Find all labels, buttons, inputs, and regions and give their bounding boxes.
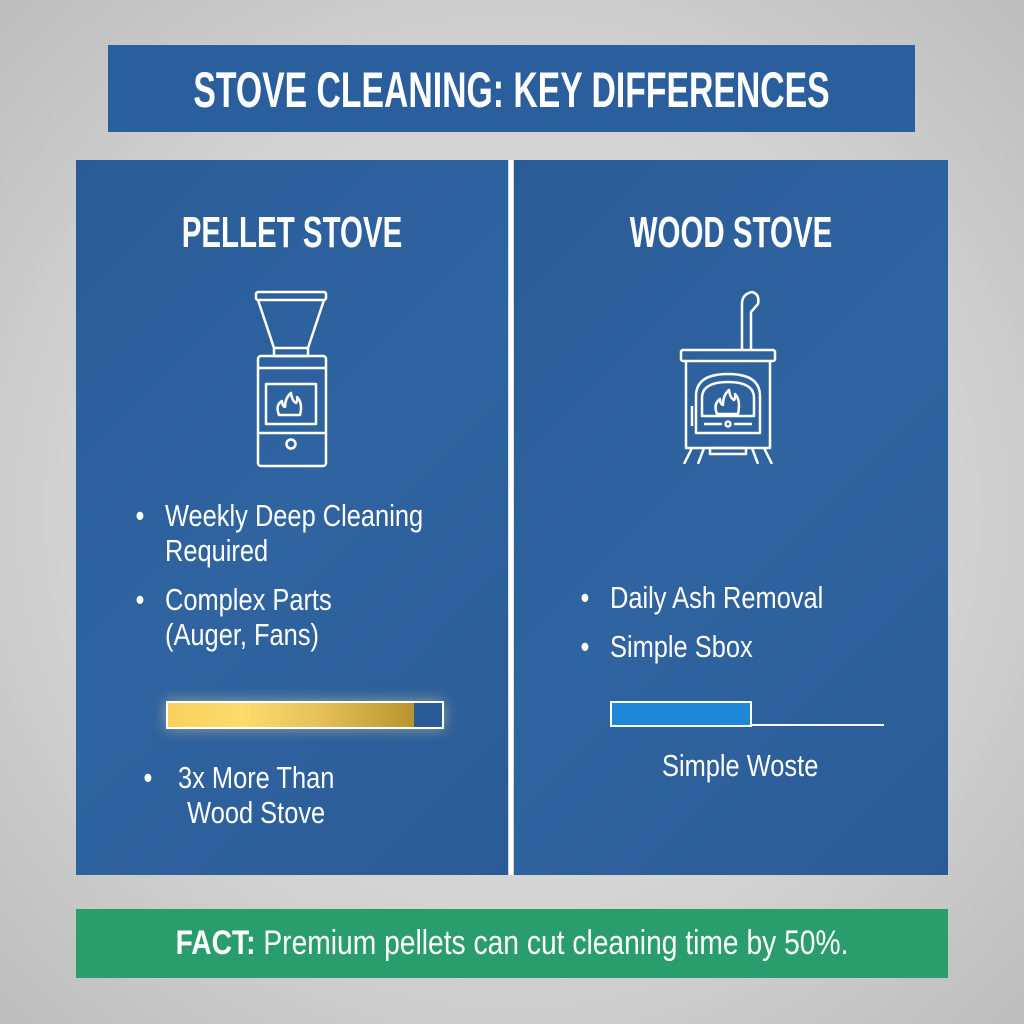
title: STOVE CLEANING: KEY DIFFERENCES — [193, 62, 830, 118]
panel: wood stove: • — [580, 580, 589, 615]
bullets: Daily Ash Removal — [610, 580, 823, 615]
bullet: 3x more: Wood Stove — [187, 795, 325, 830]
panel: pellet stove: • — [135, 498, 144, 533]
panel: pellet stove: (Auger, Fans) — [165, 617, 319, 652]
title — [108, 45, 915, 132]
panel: pellet stove — [76, 160, 508, 875]
panel: pellet stove: • — [135, 582, 144, 617]
icon: wood stove — [680, 290, 776, 464]
bullets: Weekly Deep Cleaning — [165, 498, 423, 533]
panel: pellet stove: • — [144, 760, 152, 795]
panel: wood stove: • — [580, 629, 589, 664]
panel: pellet stove: Complex Parts — [165, 582, 332, 617]
bullets — [135, 498, 423, 568]
bar: wood effort — [610, 701, 884, 727]
panel: wood stove: Simple Sbox — [610, 629, 753, 664]
bar: pellet effort — [166, 701, 444, 729]
panel: wood stove — [514, 160, 948, 875]
icon: pellet stove — [254, 290, 328, 468]
fact banner — [76, 909, 948, 978]
bullets: Required — [165, 533, 268, 568]
heading: wood stove: WOOD STOVE — [630, 208, 832, 257]
bullet: 3x more: 3x More Than — [178, 760, 334, 795]
divider — [509, 160, 513, 875]
fact banner: FACT: Premium pellets can cut cleaning time by 50%. — [176, 924, 848, 962]
caption: simple waste: Simple Woste — [662, 748, 818, 783]
bullet: 3x more — [144, 760, 334, 830]
heading: pellet stove: PELLET STOVE — [182, 208, 402, 257]
